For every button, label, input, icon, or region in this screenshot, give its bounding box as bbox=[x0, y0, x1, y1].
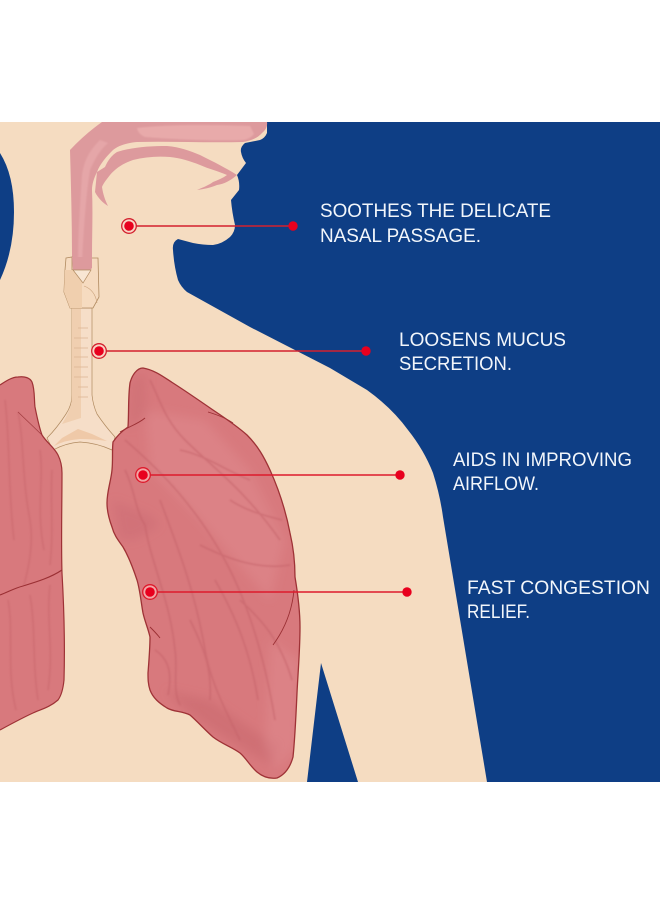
callout line: airflow bbox=[136, 468, 405, 482]
callout line: congestion bbox=[143, 585, 412, 599]
text: congestion: FAST CONGESTION bbox=[467, 577, 650, 599]
text: loosens bbox=[399, 329, 566, 375]
text: loosens: LOOSENS MUCUS bbox=[399, 329, 566, 351]
background panel bbox=[0, 122, 660, 782]
body silhouette bbox=[0, 122, 487, 782]
text: soothes bbox=[320, 200, 551, 247]
right lung bbox=[107, 368, 300, 778]
lung shading and veins bbox=[125, 381, 294, 752]
trachea bbox=[47, 308, 115, 450]
callout line: nasal passage bbox=[122, 219, 298, 233]
text: soothes: SOOTHES THE DELICATE bbox=[320, 200, 551, 222]
airway: nasal passage and throat bbox=[70, 122, 267, 268]
text: airflow bbox=[453, 449, 632, 495]
text: congestion: RELIEF. bbox=[467, 601, 530, 623]
lung fissures bbox=[120, 412, 294, 645]
callout line: mucus bbox=[92, 344, 371, 358]
text: loosens: SECRETION. bbox=[399, 353, 512, 375]
text: airflow: AIDS IN IMPROVING bbox=[453, 449, 632, 471]
larynx bbox=[64, 257, 99, 308]
text: airflow: AIRFLOW. bbox=[453, 473, 539, 495]
text: soothes: NASAL PASSAGE. bbox=[320, 225, 481, 247]
left lung (partial) bbox=[0, 377, 64, 730]
trachea rings bbox=[74, 328, 88, 397]
text: congestion bbox=[467, 577, 650, 623]
